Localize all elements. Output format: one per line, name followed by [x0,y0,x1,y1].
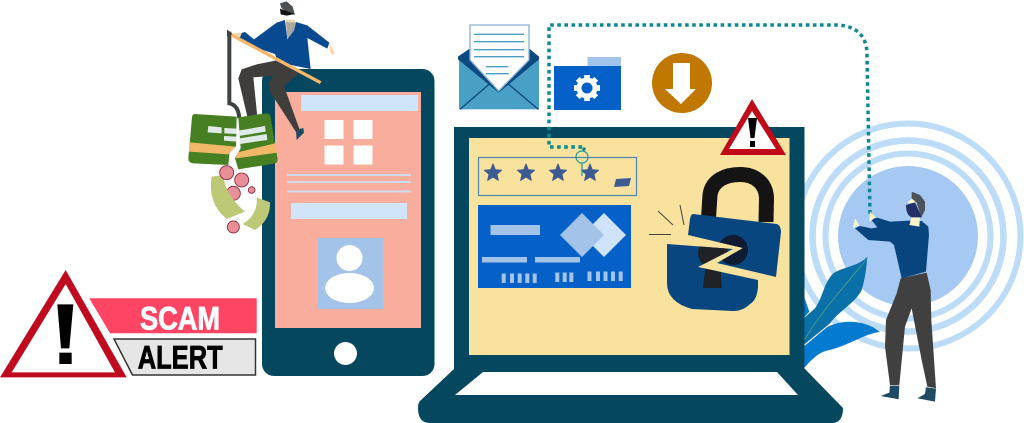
hidden coin [226,186,240,200]
laptop lid [454,127,804,372]
scam label: SCAM [140,300,220,336]
gear [574,75,600,101]
envelope icon [458,25,539,109]
hacker head [280,1,295,15]
man hands [853,212,920,228]
alert label: ALERT [138,339,223,375]
man head [906,192,925,217]
home button [334,342,357,365]
man boots [881,386,936,402]
phone screen [275,92,421,328]
concentric signal rings [796,124,1020,348]
warning triangle on laptop [720,99,786,155]
download icon [652,53,712,113]
man trousers [885,273,936,388]
avatar card [318,238,383,309]
phone [262,69,434,376]
alert band [114,339,256,375]
app grid [324,120,372,164]
password field [478,158,636,196]
broken padlock [649,174,781,311]
man shirt [855,218,929,278]
text lines [287,174,411,192]
laptop base [418,369,843,423]
warning triangle [0,270,127,377]
fishing rod [232,35,321,83]
folder icon [554,57,621,110]
falling coins [220,166,255,233]
hacker torso [239,20,329,69]
password stars [484,164,599,180]
laptop [418,127,843,423]
laptop screen [469,138,790,355]
hacker fishing [188,1,335,233]
dotted connection line [549,25,870,215]
phone top bar [301,95,418,111]
scam alert badge [0,270,257,377]
hacker legs [238,60,300,132]
fishing line and hook [229,32,239,118]
leaves [802,257,880,371]
phone input bar [291,203,407,219]
scam band [89,298,257,333]
green arcs [211,175,270,230]
man reaching [853,192,936,402]
torn credit card [188,113,278,169]
credit card on screen [478,205,631,288]
